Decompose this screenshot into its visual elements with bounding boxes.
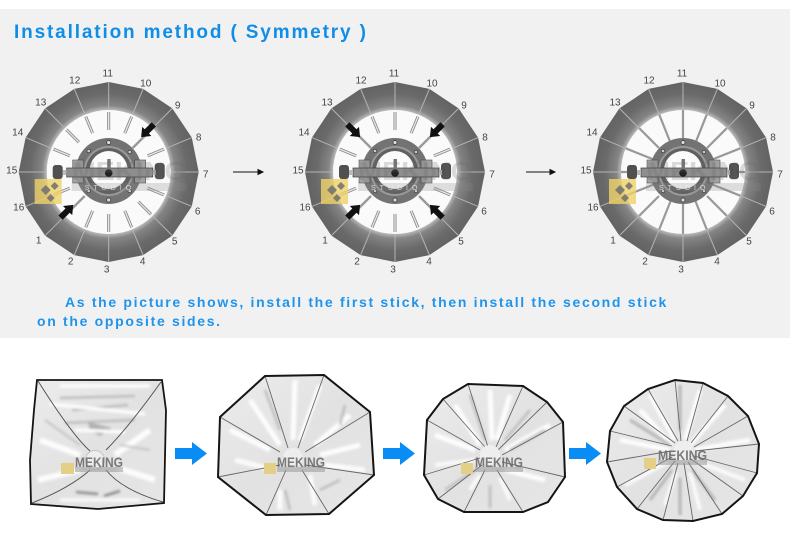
diagram: wheel step one, first pair of sticks: 9: [175, 100, 181, 112]
diagram: wheel step two, four diagonal sticks: 5: [458, 236, 464, 248]
photo: octagonal softbox: [218, 375, 374, 515]
diagram: wheel step two, four diagonal sticks: 7: [489, 170, 495, 180]
diagram: wheel step one, first pair of sticks: 15: [6, 166, 18, 176]
arrow: blue, square to octagon: [175, 442, 207, 465]
diagram: wheel step one, first pair of sticks: 4: [140, 256, 146, 268]
diagram: wheel step three, all sticks installed: 13: [609, 98, 621, 108]
diagram: wheel step two, four diagonal sticks: 16: [299, 202, 311, 214]
diagram: wheel step three, all sticks installed: 2: [642, 256, 648, 268]
arrow: blue, octagon to twelve-sided: [383, 442, 415, 465]
photo: square softbox: [30, 380, 166, 509]
text block: instructions: [37, 294, 668, 329]
diagram: wheel step one, first pair of sticks: 12: [69, 76, 81, 86]
photo: sixteen-sided softbox: MEKING: [658, 447, 707, 463]
text block: instructions: As the picture shows, install the first stick, then install the second stick: [65, 294, 668, 310]
diagram: wheel step two, four diagonal sticks: 10: [426, 78, 438, 90]
diagram: wheel step one, first pair of sticks: 7: [203, 170, 209, 180]
diagram: wheel step one, first pair of sticks: 11: [103, 68, 113, 80]
photo: square softbox: MEKING: [75, 454, 123, 470]
diagram: wheel step two, four diagonal sticks: [292, 68, 495, 276]
diagram: wheel step one, first pair of sticks: 6: [195, 206, 201, 218]
diagram: wheel step three, all sticks installed: 12: [643, 76, 655, 86]
diagram: wheel step one, first pair of sticks: 1: [36, 236, 42, 246]
diagram: wheel step one, first pair of sticks: 2: [68, 256, 74, 268]
diagram: wheel step two, four diagonal sticks: 15: [292, 166, 304, 176]
diagram: wheel step one, first pair of sticks: 10: [140, 78, 152, 90]
diagram: wheel step two, four diagonal sticks: 4: [426, 256, 432, 268]
diagram: wheel step three, all sticks installed: 4: [714, 256, 720, 268]
diagram: wheel step three, all sticks installed: 10: [714, 78, 726, 90]
diagram: wheel step three, all sticks installed: 6: [769, 206, 775, 218]
diagram: wheel step three, all sticks installed: 3: [678, 264, 684, 276]
diagram: wheel step three, all sticks installed: 1: [610, 236, 616, 246]
diagram: wheel step one, first pair of sticks: 5: [172, 236, 178, 248]
diagram: wheel step three, all sticks installed: 15: [580, 166, 592, 176]
photo: octagonal softbox: MEKING: [277, 454, 325, 470]
diagram: wheel step one, first pair of sticks: [6, 68, 209, 276]
photo: twelve-sided softbox: [424, 384, 565, 512]
diagram: wheel step one, first pair of sticks: 13: [35, 98, 47, 108]
diagram: wheel step one, first pair of sticks: 16: [13, 202, 25, 214]
diagram: wheel step two, four diagonal sticks: 3: [390, 264, 396, 276]
diagram: wheel step three, all sticks installed: 9: [749, 100, 755, 112]
diagram: wheel step three, all sticks installed: 14: [586, 128, 598, 138]
diagram: wheel step three, all sticks installed: 7: [777, 170, 783, 180]
panel: installation method background: [0, 9, 790, 338]
diagram: wheel step three, all sticks installed: 11: [677, 68, 688, 80]
arrow: step one to step two: [233, 170, 263, 174]
diagram: wheel step one, first pair of sticks: 8: [196, 132, 202, 144]
arrow: blue, twelve-sided to sixteen-sided: [569, 442, 601, 465]
diagram: wheel step two, four diagonal sticks: 2: [354, 256, 360, 268]
diagram: wheel step one, first pair of sticks: 14: [12, 128, 24, 138]
diagram: wheel step two, four diagonal sticks: 8: [482, 132, 488, 144]
diagram: wheel step two, four diagonal sticks: 9: [461, 100, 467, 112]
diagram: wheel step two, four diagonal sticks: 14: [298, 128, 310, 138]
diagram: wheel step three, all sticks installed: 5: [746, 236, 752, 248]
photo: twelve-sided softbox: MEKING: [475, 454, 523, 470]
diagram: wheel step two, four diagonal sticks: 1: [322, 236, 328, 246]
diagram: wheel step three, all sticks installed: 16: [587, 202, 599, 214]
photo: sixteen-sided softbox: [607, 380, 759, 521]
heading: installation method: Installation method ( Symmetry ): [14, 22, 368, 43]
arrow: step two to step three: [526, 170, 555, 174]
diagram: wheel step one, first pair of sticks: 3: [104, 264, 110, 276]
diagram: wheel step three, all sticks installed: [580, 68, 783, 276]
diagram: wheel step two, four diagonal sticks: 13: [321, 98, 333, 108]
diagram: wheel step two, four diagonal sticks: 12: [355, 76, 367, 86]
diagram: wheel step two, four diagonal sticks: 11: [389, 68, 400, 80]
diagram: wheel step three, all sticks installed: 8: [770, 132, 776, 144]
text block: instructions: on the opposite sides.: [37, 313, 222, 329]
diagram: wheel step two, four diagonal sticks: 6: [481, 206, 487, 218]
